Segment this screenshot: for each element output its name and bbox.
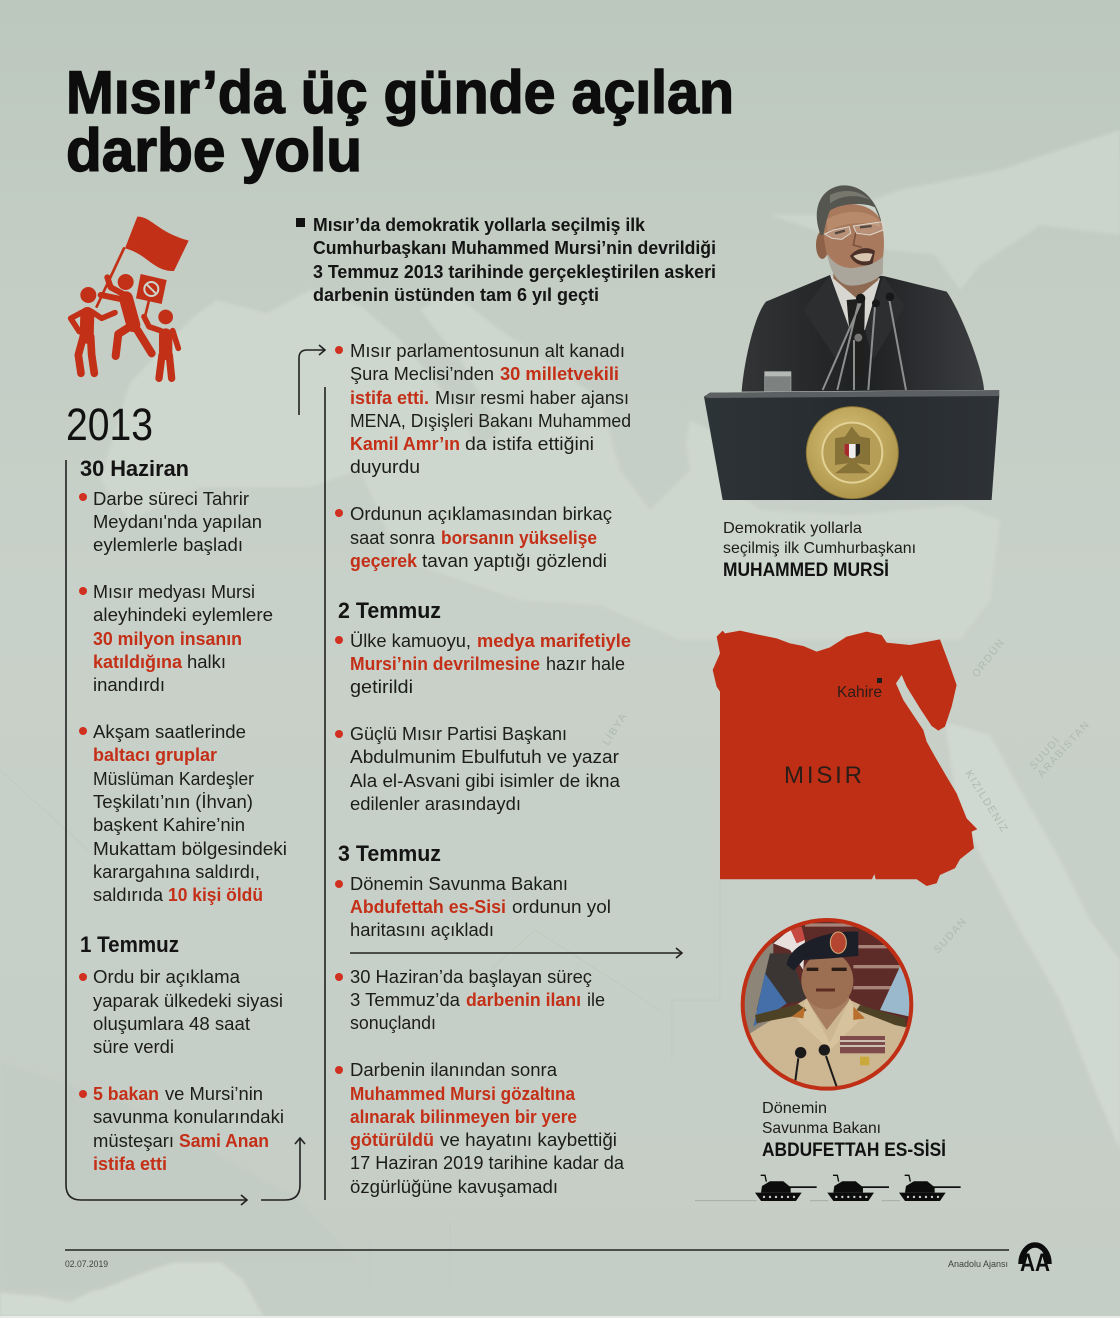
photo: Sisi portrait	[740, 917, 917, 1097]
bullet: borsa: geçerek	[350, 550, 418, 571]
bullet: 5 bakan: savunma konularındaki	[93, 1106, 284, 1127]
bullet: yol haritası: ordunun yol	[512, 896, 611, 917]
bullet: 5 bakan: istifa etti	[93, 1153, 167, 1174]
bullet: medya: aleyhindeki eylemlere	[93, 604, 273, 625]
bullet: baltacı gruplar: karargahına saldırdı,	[93, 861, 260, 882]
bullet: 48 saat: süre verdi	[93, 1036, 174, 1057]
timeline arrow: left column	[66, 460, 305, 1205]
bullet: darbenin ilanı: 30 Haziran’da başlayan süreç	[350, 966, 592, 987]
footer date: 02.07.2019	[65, 1259, 108, 1270]
bullet: 5 bakan: Sami Anan	[179, 1130, 269, 1151]
map label: Suudi Arabistan: SUUDİ	[1027, 733, 1063, 772]
bullet: 5 bakan: ve Mursi’nin	[165, 1083, 263, 1104]
bullet: gözaltı: Muhammed Mursi gözaltına	[350, 1083, 576, 1104]
bullet: baltacı gruplar: Mukattam bölgesindeki	[93, 838, 287, 859]
Cairo label: Kahire	[837, 684, 882, 701]
suit	[742, 275, 984, 392]
bullet: medya marifetiyle: Mursi’nin devrilmesine	[350, 653, 540, 674]
bullet: borsa	[335, 503, 612, 571]
bullet: yol haritası: Dönemin Savunma Bakanı	[350, 873, 568, 894]
Cairo marker	[877, 678, 882, 683]
bullet: Şura Meclisi: Mısır resmi haber ajansı	[435, 387, 629, 408]
country label: MISIR	[784, 762, 862, 789]
bullet: yol haritası: Abdufettah es-Sisi	[350, 896, 506, 917]
bullet: medya	[79, 581, 273, 695]
bullet: gözaltı: özgürlüğüne kavuşamadı	[350, 1176, 558, 1197]
footer source: Anadolu Ajansı	[948, 1259, 1008, 1270]
logo: Anadolu Ajansı: AA	[1020, 1249, 1050, 1277]
face	[801, 952, 853, 1009]
title: darbe yolu	[66, 117, 362, 184]
bullet: medya: Mısır medyası Mursi	[93, 581, 255, 602]
title	[66, 59, 734, 184]
bullet: Şura Meclisi: 30 milletvekili	[500, 363, 619, 384]
nose	[853, 232, 862, 247]
bullet: medya marifetiyle	[335, 630, 631, 697]
bullet: 48 saat: oluşumlara 48 saat	[93, 1013, 251, 1034]
bullet: baltacı gruplar: saldırıda	[93, 884, 164, 905]
microphones	[795, 1047, 806, 1058]
medals	[840, 1036, 885, 1053]
bullet: borsa: borsanın yükselişe	[441, 527, 597, 548]
caption: Sisi	[762, 1100, 946, 1161]
timeline arrow: connector to middle column	[299, 345, 325, 1200]
lapels	[803, 275, 905, 360]
bullet: Şura Meclisi: da istifa ettiğini	[465, 433, 594, 454]
photo: Mursi at podium	[704, 185, 999, 500]
caption: Mursi: MUHAMMED MURSİ	[723, 560, 889, 581]
bullet: darbenin ilanı: darbenin ilanı	[466, 989, 581, 1010]
face	[823, 204, 884, 281]
bullet: gözaltı: ve hayatını kaybettiği	[440, 1129, 617, 1150]
intro text	[296, 214, 716, 305]
bullet: gözaltı: Darbenin ilanından sonra	[350, 1059, 558, 1080]
bullet: yol haritası: haritasını açıkladı	[350, 919, 494, 940]
caption: Mursi: seçilmiş ilk Cumhurbaşkanı	[723, 540, 916, 557]
caption: Sisi: ABDUFETTAH ES-SİSİ	[762, 1140, 946, 1161]
microphones	[823, 300, 906, 390]
bullet: medya marifetiyle: Ülke kamuoyu,	[350, 630, 471, 651]
map label: Kızıldeniz: KIZILDENİZ	[962, 768, 1011, 835]
bullet: gözaltı: alınarak bilinmeyen bir yere	[350, 1106, 577, 1127]
shirt and tie	[830, 275, 880, 330]
date heading: 3 Temmuz: 3 Temmuz	[338, 841, 441, 866]
bullet: darbenin ilanı: ile	[587, 989, 605, 1010]
bullet: Tahrir: eylemlerle başladı	[93, 534, 243, 555]
icon: protesters with flag	[71, 217, 189, 378]
map label: Ürdün: ORDÜN	[970, 636, 1008, 680]
beret	[787, 932, 858, 971]
bullet: medya marifetiyle: medya marifetiyle	[477, 630, 631, 651]
bullet: Şura Meclisi: Kamil Amr’ın	[350, 433, 460, 454]
bullet: Şura Meclisi	[335, 340, 631, 477]
ear	[816, 231, 829, 259]
date heading: 30 Haziran: 30 Haziran	[80, 456, 189, 481]
map label: Sudan: SUDAN	[931, 915, 970, 956]
caption: Sisi: Savunma Bakanı	[762, 1120, 881, 1137]
glasses	[825, 222, 883, 239]
date heading: 1 Temmuz: 1 Temmuz	[80, 932, 179, 957]
bullet: borsa: tavan yaptığı gözlendi	[422, 550, 607, 571]
year heading: 2013	[66, 399, 153, 450]
title: Mısır’da üç günde açılan	[66, 59, 734, 126]
bullet: Tahrir: Meydanı'nda yapılan	[93, 511, 262, 532]
caption: Mursi	[723, 520, 916, 581]
bullet: medya: 30 milyon insanın	[93, 628, 242, 649]
bullet: Şura Meclisi: MENA, Dışişleri Bakanı Muhammed	[350, 410, 631, 431]
bullet: 48 saat: Ordu bir açıklama	[93, 966, 241, 987]
hair	[817, 185, 882, 235]
map label: Libya: LİBYA	[600, 710, 630, 748]
caption: Mursi: Demokratik yollarla	[723, 520, 862, 537]
bullet: baltacı gruplar: 10 kişi öldü	[168, 884, 263, 905]
bullet: borsa: saat sonra	[350, 527, 436, 548]
bullet: baltacı gruplar: Teşkilatı’nın (İhvan)	[93, 791, 253, 812]
bullet: gözaltı: 17 Haziran 2019 tarihine kadar da	[350, 1152, 625, 1173]
bullet: darbenin ilanı: sonuçlandı	[350, 1012, 436, 1033]
caption: Sisi: Dönemin	[762, 1100, 827, 1117]
bullet: medya: katıldığına	[93, 651, 183, 672]
date heading: 2 Temmuz: 2 Temmuz	[338, 598, 441, 623]
footer rule	[65, 1249, 1009, 1251]
intro text: Cumhurbaşkanı Muhammed Mursi’nin devrildiği	[313, 237, 716, 258]
moustache and mouth	[850, 248, 875, 265]
bullet: gözaltı: götürüldü	[350, 1129, 434, 1150]
bullet: baltacı gruplar: baltacı gruplar	[93, 744, 217, 765]
eyes	[835, 226, 872, 233]
bullet: baltacı gruplar: başkent Kahire’nin	[93, 814, 245, 835]
map label: Suudi Arabistan: ARABİSTAN	[1035, 718, 1093, 780]
intro text: Mısır’da demokratik yollarla seçilmiş ilk	[313, 214, 646, 235]
bullet: medya: inandırdı	[93, 674, 165, 695]
bullet: darbenin ilanı: 3 Temmuz’da	[350, 989, 461, 1010]
bullet: medya marifetiyle: hazır hale	[546, 653, 625, 674]
bullet: Şura Meclisi: duyurdu	[350, 456, 420, 477]
bullet: 48 saat: yaparak ülkedeki siyasi	[93, 990, 283, 1011]
bullet: darbenin ilanı	[335, 966, 605, 1033]
bullet: medya: halkı	[187, 651, 226, 672]
bullet: Şura Meclisi: Mısır parlamentosunun alt kanadı	[350, 340, 625, 361]
forehead shading	[827, 212, 880, 232]
uniform	[750, 998, 907, 1097]
bullet: 5 bakan: 5 bakan	[93, 1083, 159, 1104]
bullet: Güçlü Mısır: Ala el-Asvani gibi isimler de ikna	[350, 770, 621, 791]
beard	[827, 253, 883, 286]
bullet: Şura Meclisi: istifa etti.	[350, 387, 429, 408]
neck	[833, 263, 878, 298]
intro text: 3 Temmuz 2013 tarihinde gerçekleştirilen askeri	[313, 261, 716, 282]
bullet: Güçlü Mısır: edilenler arasındaydı	[350, 793, 521, 814]
bullet: borsa: Ordunun açıklamasından birkaç	[350, 503, 612, 524]
bullet: Tahrir: Darbe süreci Tahrir	[93, 488, 249, 509]
intro text: darbenin üstünden tam 6 yıl geçti	[313, 284, 599, 305]
bullet: 5 bakan	[79, 1083, 284, 1174]
seal	[806, 407, 898, 499]
podium	[704, 393, 999, 500]
bullet: Tahrir	[79, 488, 262, 555]
bullet: medya marifetiyle: getirildi	[350, 676, 413, 697]
icon: tanks	[695, 1175, 961, 1201]
bullet: 48 saat	[79, 966, 283, 1057]
bullet: yol haritası	[335, 873, 611, 940]
bullet: baltacı gruplar: Akşam saatlerinde	[93, 721, 246, 742]
map: Egypt	[713, 631, 977, 886]
bullet: Güçlü Mısır: Abdulmunim Ebulfutuh ve yazar	[350, 746, 619, 767]
bullet: gözaltı	[335, 1059, 625, 1197]
arrow toward Sisi	[350, 948, 682, 958]
bullet: Güçlü Mısır: Güçlü Mısır Partisi Başkanı	[350, 723, 567, 744]
bullet: Güçlü Mısır	[335, 723, 621, 814]
epaulettes	[755, 1004, 807, 1023]
bullet: 5 bakan: müsteşarı	[93, 1130, 174, 1151]
bullet: baltacı gruplar: Müslüman Kardeşler	[93, 768, 254, 789]
bullet: Şura Meclisi: Şura Meclisi’nden	[350, 363, 494, 384]
water glass	[765, 372, 791, 392]
bullet: baltacı gruplar	[79, 721, 287, 905]
